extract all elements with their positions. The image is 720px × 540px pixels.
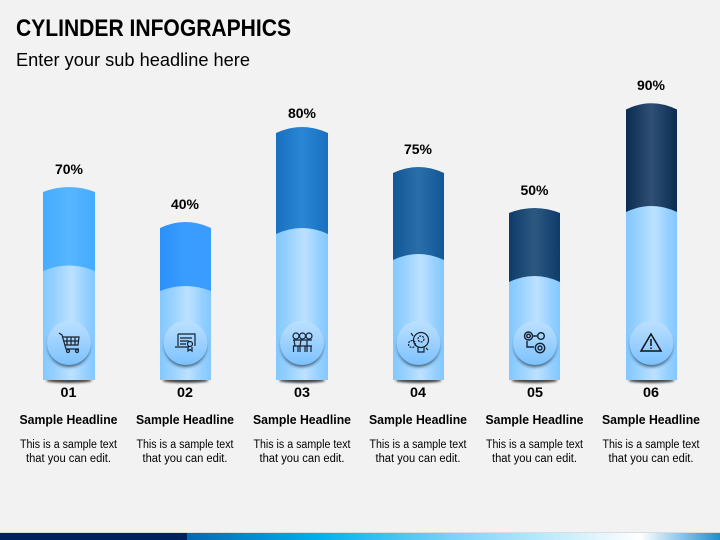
text block 03: that you can edit.: [260, 453, 344, 465]
column 05: icon disc with process gears: [513, 321, 557, 367]
column 06: icon disc with warning triangle: [630, 321, 674, 367]
text block 06: that you can edit.: [608, 453, 694, 465]
text block 05: [486, 412, 584, 465]
column 02: icon disc with certificate: [164, 321, 208, 367]
text block 02: This is a sample text: [136, 439, 234, 451]
column 06: 90% cylinder: 90%: [637, 77, 666, 93]
column 01: 70% cylinder: 01: [60, 384, 77, 400]
text block 01: This is a sample text: [20, 439, 118, 451]
column 03: 80% cylinder: 03: [294, 384, 310, 400]
text block 02: [136, 412, 234, 465]
text block 05: This is a sample text: [486, 439, 584, 451]
column 01: 70% cylinder: 70%: [55, 161, 84, 177]
column 03: icon disc with team: [280, 321, 324, 367]
text block 02: that you can edit.: [142, 453, 228, 465]
text block 05: Sample Headline: [486, 412, 584, 427]
text block 06: [602, 412, 700, 465]
column 04: 75% cylinder: [393, 141, 444, 400]
column 02: 40% cylinder: 02: [177, 384, 193, 400]
column 05: 50% cylinder: 05: [527, 384, 543, 400]
text block 05: that you can edit.: [492, 453, 577, 465]
text block 03: This is a sample text: [254, 439, 351, 451]
text block 01: that you can edit.: [26, 453, 111, 465]
column 01: icon disc with cart: [47, 321, 91, 367]
text block 01: [20, 412, 118, 465]
column 03: 80% cylinder: 80%: [288, 105, 317, 121]
title: CYLINDER INFOGRAPHICS: [16, 15, 291, 42]
text block 04: that you can edit.: [376, 453, 460, 465]
column 06: 90% cylinder: 06: [643, 384, 659, 400]
text block 06: This is a sample text: [602, 439, 700, 451]
text block 04: [369, 412, 467, 465]
column 04: 75% cylinder: 75%: [404, 141, 433, 157]
column 02: 40% cylinder: 40%: [171, 196, 200, 212]
text block 02: Sample Headline: [136, 412, 234, 427]
text block 03: Sample Headline: [253, 412, 351, 427]
text block 03: [253, 412, 351, 465]
text block 06: Sample Headline: [602, 412, 700, 427]
column 02: 40% cylinder: [160, 196, 211, 400]
column 06: 90% cylinder: [626, 77, 677, 400]
subtitle: Enter your sub headline here: [16, 49, 250, 70]
column 05: 50% cylinder: 50%: [520, 182, 549, 198]
column 05: 50% cylinder: [509, 182, 560, 400]
column 01: 70% cylinder: [43, 161, 95, 400]
text block 04: This is a sample text: [370, 439, 467, 451]
column 04: icon disc with gears and bulb: [396, 321, 440, 367]
footer bar: [0, 532, 720, 540]
text block 01: Sample Headline: [20, 412, 118, 427]
column 04: 75% cylinder: 04: [410, 384, 426, 400]
column 03: 80% cylinder: [276, 105, 328, 400]
text block 04: Sample Headline: [369, 412, 467, 427]
